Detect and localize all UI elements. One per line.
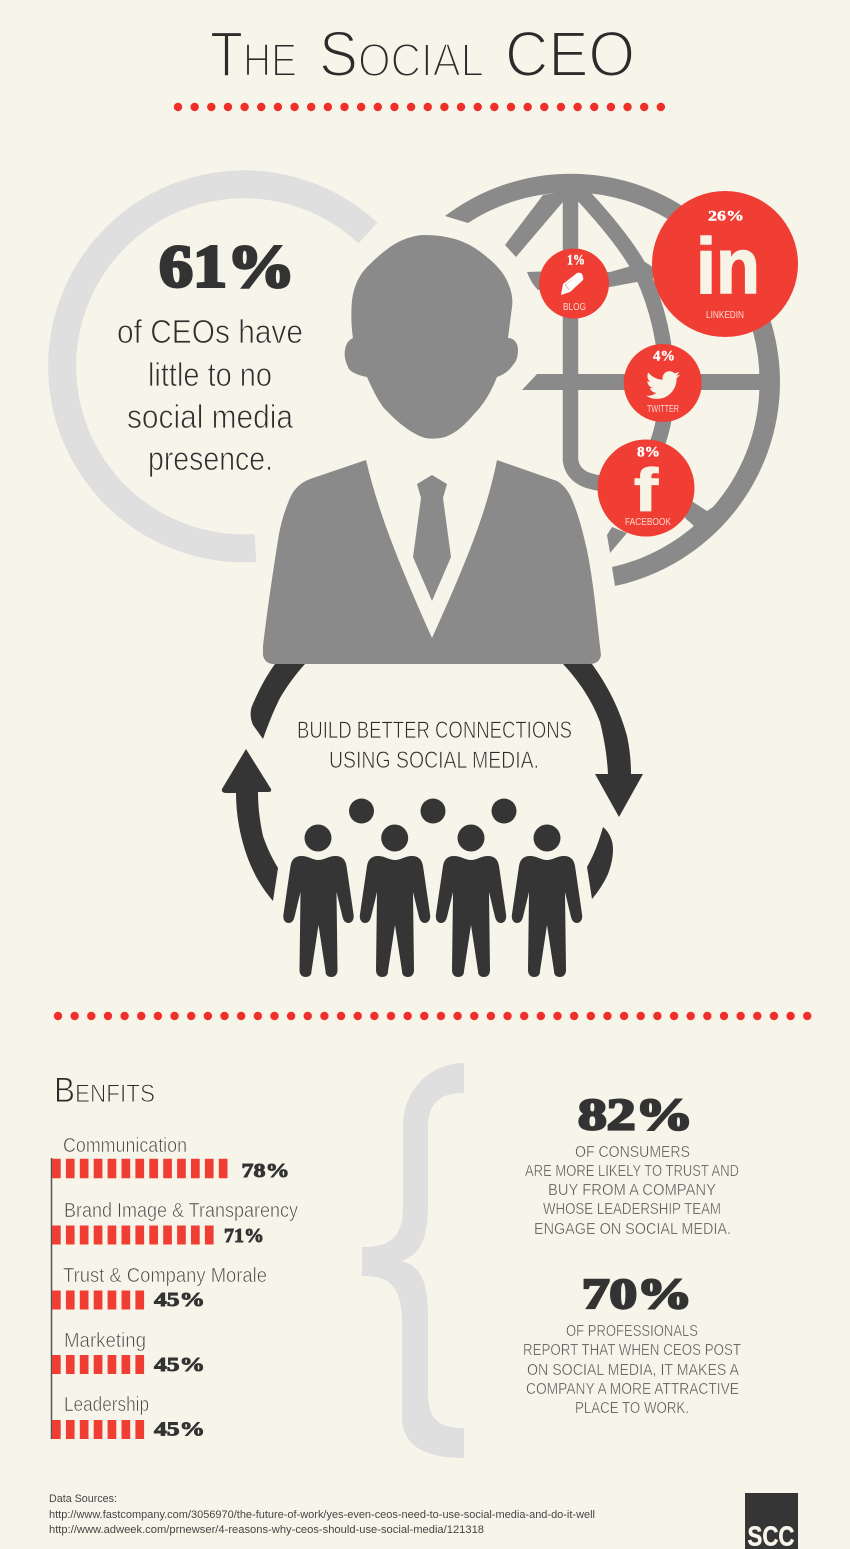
statistic: 70% of professionals: [523, 1272, 741, 1417]
callout: build better connections: [297, 717, 572, 774]
bar: marketing: Marketing: [64, 1330, 146, 1352]
icon: linkedin bubble: in: [696, 221, 760, 310]
bar: communication: 78%: [242, 1160, 290, 1182]
61% statistic: social media: [127, 398, 294, 435]
ring behind 61% statistic: [62, 184, 368, 548]
bar chart: benefits: [52, 1135, 298, 1440]
bar: leadership: [52, 1394, 205, 1440]
bar: leadership: 45%: [154, 1418, 205, 1440]
statistic: 70% of professionals: PLACE TO WORK.: [575, 1400, 689, 1417]
icon: linkedin bubble: LINKEDIN: [706, 310, 744, 321]
bar: trust and company morale: 45%: [154, 1289, 205, 1311]
title: CEO: [505, 18, 635, 90]
61% statistic: of CEOs have: [117, 313, 303, 350]
icon: blog bubble: [539, 248, 609, 318]
title: [210, 18, 635, 90]
statistic: 70% of professionals: OF PROFESSIONALS: [566, 1323, 698, 1340]
icon: blog bubble: 1%: [567, 252, 585, 268]
statistic: 70% of professionals: COMPANY A MORE ATTRACTIVE: [526, 1381, 739, 1398]
statistic: 82% of consumers: OF CONSUMERS: [575, 1144, 690, 1161]
CEO silhouette: [263, 235, 601, 664]
suit: [263, 460, 601, 664]
icon: linkedin bubble: [652, 191, 798, 337]
61% statistic: presence.: [148, 440, 273, 477]
icon: facebook bubble: 8%: [637, 445, 660, 461]
icon: twitter bubble: 4%: [653, 349, 675, 365]
icon: group of people: [283, 798, 582, 977]
tie: [413, 475, 451, 601]
title: THE: [210, 18, 297, 90]
bar: leadership: Leadership: [64, 1394, 149, 1416]
bar: marketing: 45%: [154, 1354, 205, 1376]
statistic: 70% of professionals: ON SOCIAL MEDIA, IT MAKES A: [527, 1362, 740, 1379]
bar: brand image and transparency: [52, 1200, 298, 1247]
bar: communication: Communication: [63, 1135, 187, 1157]
61% statistic: little to no: [148, 356, 272, 393]
data sources: [49, 1493, 595, 1536]
heading: benefits: BENFITS: [54, 1071, 155, 1110]
callout: build better connections: BUILD BETTER CONNECTIONS: [297, 717, 572, 744]
globe: [445, 174, 780, 586]
bar: trust and company morale: [52, 1265, 267, 1311]
head: [345, 235, 518, 439]
icon: facebook bubble: FACEBOOK: [625, 517, 671, 528]
icon: twitter bubble: [624, 344, 702, 422]
statistic: 70% of professionals: 70%: [582, 1272, 692, 1318]
61% statistic: 61%: [159, 234, 295, 300]
title: SOCIAL: [319, 18, 484, 90]
bar: brand image and transparency: 71%: [224, 1225, 264, 1247]
data sources: Data Sources:: [49, 1493, 117, 1505]
callout: build better connections: USING SOCIAL MEDIA.: [329, 747, 539, 774]
data sources: http://www.adweek.com/prnewser/4-reasons-why-ceos-should-use-social-media/121318: [49, 1524, 484, 1536]
61% statistic: [117, 234, 303, 477]
statistic: 70% of professionals: REPORT THAT WHEN CEOS POST: [523, 1342, 741, 1359]
logo: SCC: [745, 1493, 798, 1549]
bar: communication: [52, 1135, 290, 1182]
statistic: 82% of consumers: WHOSE LEADERSHIP TEAM: [543, 1201, 721, 1218]
bar: marketing: [52, 1330, 205, 1376]
icon: facebook bubble: f: [634, 457, 659, 524]
arrows: connection cycle: [222, 664, 643, 901]
statistic: 82% of consumers: BUY FROM A COMPANY: [548, 1182, 716, 1199]
curly brace: [362, 1063, 464, 1458]
bar: trust and company morale: Trust & Company Morale: [63, 1265, 267, 1287]
icon: linkedin bubble: 26%: [708, 208, 744, 224]
statistic: 82% of consumers: ENGAGE ON SOCIAL MEDIA.: [534, 1221, 731, 1238]
icon: blog bubble: BLOG: [563, 302, 586, 313]
bar: brand image and transparency: Brand Image & Transparency: [64, 1200, 298, 1222]
statistic: 82% of consumers: 82%: [578, 1090, 693, 1139]
statistic: 82% of consumers: ARE MORE LIKELY TO TRUST AND: [525, 1163, 739, 1180]
data sources: http://www.fastcompany.com/3056970/the-future-of-work/yes-even-ceos-need-to-use-social-media-and-do-it-well: [49, 1509, 595, 1521]
icon: facebook bubble: [598, 440, 694, 536]
icon: twitter bubble: TWITTER: [647, 404, 679, 415]
statistic: 82% of consumers: [525, 1090, 739, 1238]
